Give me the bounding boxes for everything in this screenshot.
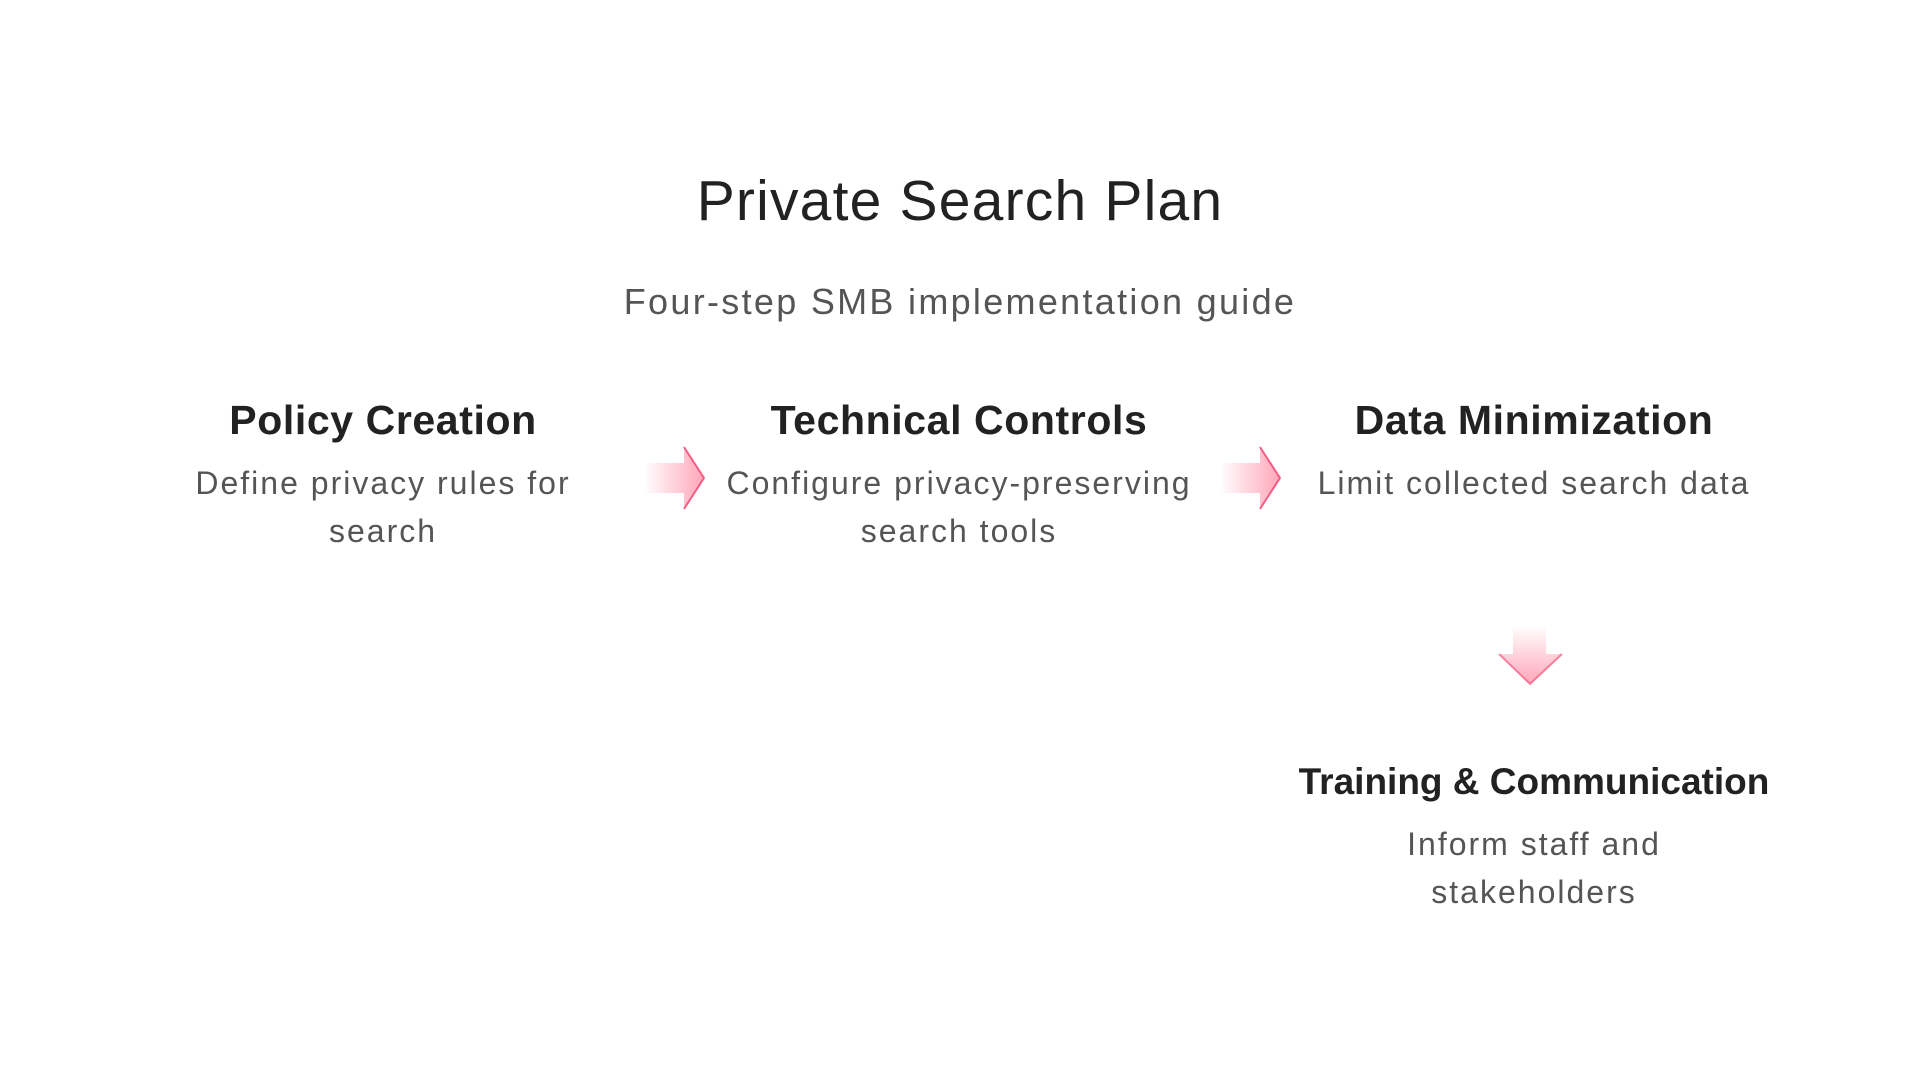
arrow 2 <box>1226 446 1282 510</box>
step 4: Training & Communication: stakeholders <box>1431 874 1637 910</box>
step 3: Data Minimization <box>1318 397 1750 501</box>
step 3: Data Minimization: Data Minimization <box>1355 397 1713 443</box>
step 2: Technical Controls: Technical Controls <box>771 397 1147 443</box>
arrow 1 <box>650 446 706 510</box>
step 1: Policy Creation: Define privacy rules for <box>195 465 571 501</box>
arrow down <box>1498 631 1563 686</box>
step 2: Technical Controls: Configure privacy-preserving <box>726 465 1192 501</box>
title: Private Search Plan <box>697 169 1223 233</box>
step 1: Policy Creation: Policy Creation <box>229 397 537 443</box>
step 4: Training & Communication: Training & Communication <box>1299 761 1769 802</box>
step 1: Policy Creation: search <box>329 513 437 549</box>
step 4: Training & Communication: Inform staff and <box>1407 826 1661 862</box>
step 3: Data Minimization: Limit collected search data <box>1318 465 1750 501</box>
step 2: Technical Controls <box>726 397 1192 549</box>
step 4: Training & Communication <box>1299 761 1769 910</box>
subtitle: Four-step SMB implementation guide <box>624 281 1296 322</box>
step 1: Policy Creation <box>195 397 571 549</box>
step 2: Technical Controls: search tools <box>861 513 1057 549</box>
